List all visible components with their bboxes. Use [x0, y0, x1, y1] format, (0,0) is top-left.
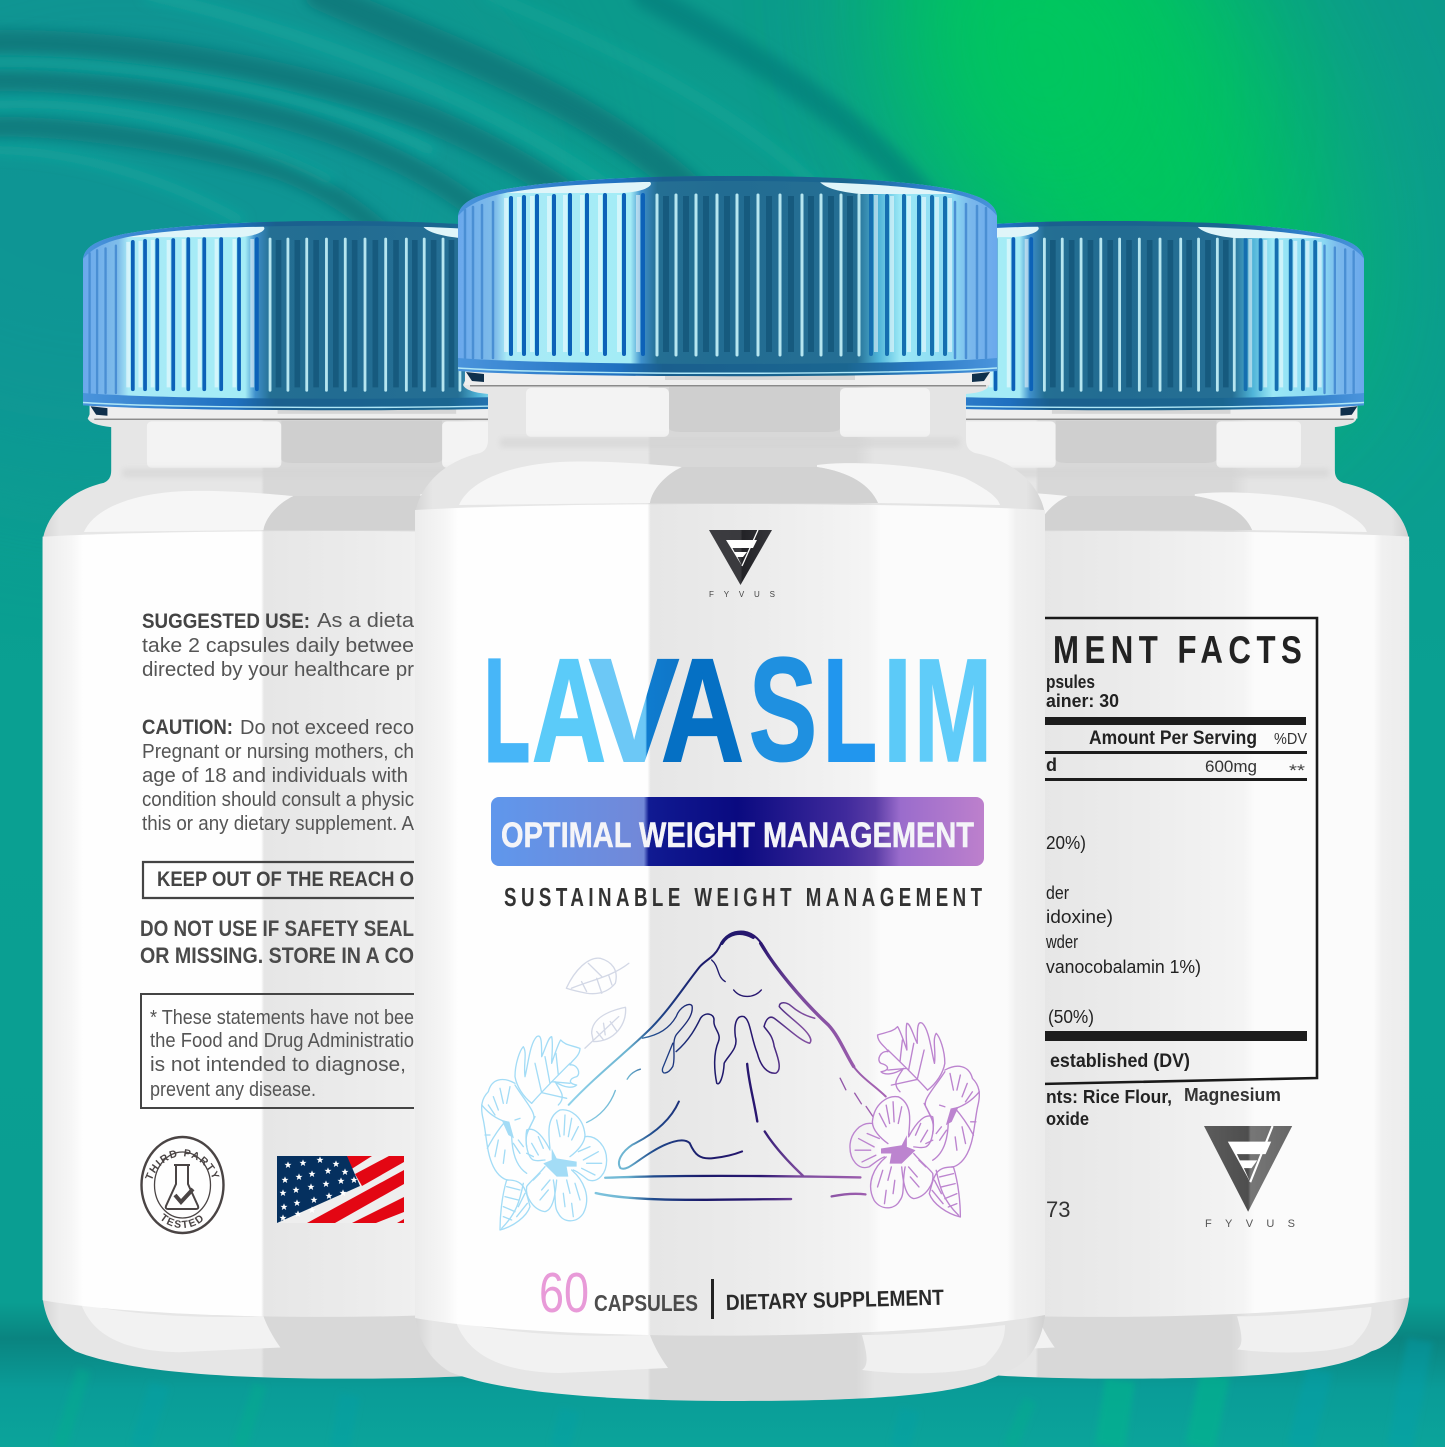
supplement facts panel: 20%): [1046, 833, 1086, 853]
caution text: age of 18 and individuals with: [142, 765, 408, 787]
supplement facts panel: **: [1289, 761, 1305, 780]
bottle body and cap: [43, 221, 635, 1379]
disclaimer box: the Food and Drug Administratio: [150, 1030, 414, 1052]
supplement facts panel: der: [1046, 883, 1069, 903]
supplement facts panel: 600mg: [1205, 757, 1257, 776]
icon: fyvus logo large: [1204, 1126, 1295, 1230]
capsule count and dietary supplement line: 60: [539, 1261, 589, 1325]
supplement facts panel: MENT FACTS: [1053, 629, 1302, 672]
banner: optimal weight management: OPTIMAL WEIGHT MANAGEMENT: [501, 816, 974, 855]
supplement facts panel: ainer: 30: [1046, 691, 1119, 711]
icon: fyvus logo: [709, 530, 775, 599]
icon: third party tested badge: [140, 1136, 225, 1234]
supplement facts panel: d: [1046, 755, 1057, 775]
capsule count and dietary supplement line: DIETARY SUPPLEMENT: [726, 1285, 945, 1315]
supplement facts panel: established (DV): [1050, 1051, 1190, 1072]
capsule count and dietary supplement line: CAPSULES: [594, 1290, 698, 1316]
capsule count and dietary supplement line: [539, 1261, 945, 1325]
caution text: this or any dietary supplement. A: [142, 813, 415, 835]
disclaimer box: [141, 994, 414, 1108]
title: LAVASLIM: S: [749, 628, 817, 792]
other ingredients text: Magnesium: [1184, 1085, 1281, 1105]
suggested use text: As a dieta: [317, 610, 415, 632]
suggested use text: SUGGESTED USE:: [142, 610, 310, 633]
disclaimer box: is not intended to diagnose,: [150, 1054, 406, 1076]
keep out of reach box: KEEP OUT OF THE REACH O: [157, 868, 414, 891]
supplement facts panel: idoxine): [1046, 907, 1113, 927]
title: LAVASLIM: I: [883, 629, 912, 793]
caution text: Do not exceed reco: [240, 717, 414, 739]
other ingredients text: 73: [1046, 1197, 1070, 1222]
right bottle: [817, 221, 1409, 1379]
keep out of reach box: [143, 862, 414, 898]
safety seal text: [140, 916, 414, 968]
icon: fyvus logo large: FYVUS: [1205, 1218, 1295, 1230]
illustration: volcano: [566, 932, 886, 1200]
bottle body and cap: [415, 176, 1045, 1401]
icon: right flowers: [850, 1023, 979, 1217]
supplement facts panel: [1040, 618, 1317, 1084]
banner: optimal weight management: [491, 797, 984, 866]
other ingredients text: [1046, 1085, 1281, 1222]
caution text: Pregnant or nursing mothers, ch: [142, 741, 414, 763]
caution text: condition should consult a physic: [142, 789, 414, 811]
caution text: [142, 716, 415, 835]
icon: american flag: [277, 1156, 404, 1223]
supplement facts panel: (50%): [1048, 1007, 1094, 1027]
supplement facts panel: vanocobalamin 1%): [1046, 957, 1201, 977]
supplement facts panel: %DV: [1274, 731, 1307, 748]
title: LAVASLIM: A: [532, 629, 606, 793]
title: LAVASLIM: V: [589, 629, 679, 793]
title: LAVASLIM: [484, 628, 992, 793]
icon: volcano outline: [569, 932, 886, 1200]
title: LAVASLIM: A: [661, 629, 744, 793]
supplement facts panel: psules: [1046, 672, 1095, 692]
icon: fyvus logo: FYVUS: [709, 590, 775, 599]
supplement facts panel: Amount Per Serving: [1089, 728, 1257, 749]
disclaimer box: prevent any disease.: [150, 1079, 316, 1101]
icon: drifting leaves: [566, 958, 629, 1048]
safety seal text: DO NOT USE IF SAFETY SEAL: [140, 916, 414, 941]
icon: third party tested badge: THIRD PARTY: [145, 1149, 220, 1179]
title: LAVASLIM: L: [484, 629, 530, 793]
title: LAVASLIM: M: [914, 629, 992, 793]
safety seal text: OR MISSING. STORE IN A CO: [140, 943, 414, 968]
suggested use text: [142, 610, 415, 681]
bottle body and cap: [817, 221, 1409, 1379]
caution text: CAUTION:: [142, 716, 233, 739]
center bottle: [415, 176, 1045, 1401]
disclaimer box: * These statements have not bee: [150, 1007, 414, 1029]
suggested use text: take 2 capsules daily betwee: [142, 635, 414, 657]
subtitle: SUSTAINABLE WEIGHT MANAGEMENT: [504, 882, 982, 912]
title: LAVASLIM: L: [823, 629, 877, 793]
icon: third party tested badge: TESTED: [162, 1213, 203, 1228]
left bottle: [42, 221, 488, 1379]
supplement facts panel: wder: [1045, 932, 1078, 952]
icon: left flowers: [482, 1036, 607, 1230]
suggested use text: directed by your healthcare pr: [142, 659, 414, 681]
other ingredients text: nts: Rice Flour,: [1046, 1087, 1172, 1107]
other ingredients text: oxide: [1046, 1109, 1089, 1129]
